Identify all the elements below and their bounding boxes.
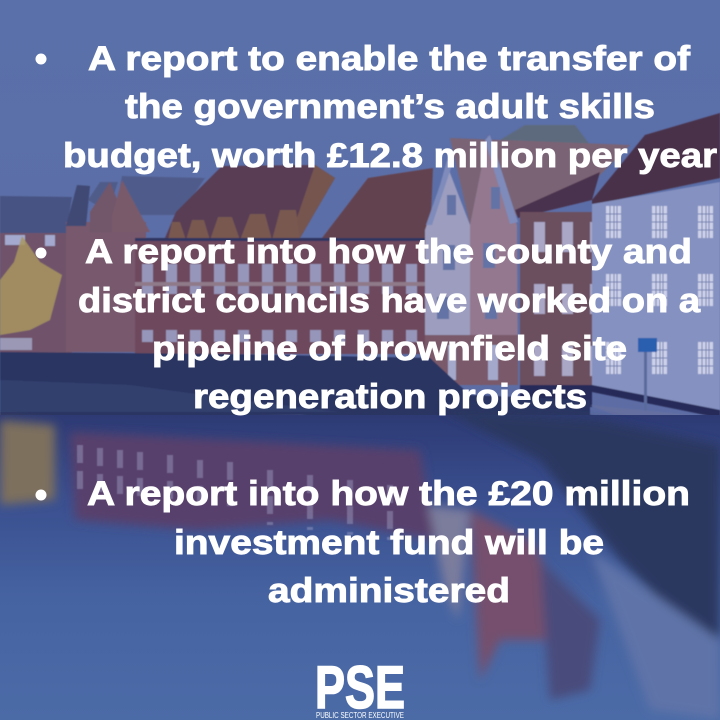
bullet 3: investment fund: A report into how the £20 million: [87, 475, 690, 513]
bullet 3: investment fund: [36, 475, 690, 610]
bullet 2: brownfield regeneration: pipeline of brownfield site: [152, 330, 627, 368]
bullet 2: brownfield regeneration: district councils have worked on a: [78, 282, 701, 320]
logo: PSE: PSE: [315, 654, 405, 720]
bullet 1: adult skills budget: [36, 40, 717, 175]
bullet 2: brownfield regeneration: [36, 233, 701, 416]
bullet 1: adult skills budget: the government’s adult skills: [125, 88, 655, 126]
bullet 1: adult skills budget: A report to enable the transfer of: [88, 40, 691, 78]
logo: PSE: PUBLIC SECTOR EXECUTIVE: [316, 711, 404, 720]
bullet 1: adult skills budget: budget, worth £12.8 million per year: [63, 137, 717, 175]
bullet 3: investment fund: investment fund will be: [174, 524, 604, 562]
bullet 2: brownfield regeneration: A report into how the county and: [85, 233, 692, 271]
bullet 2: brownfield regeneration: regeneration projects: [193, 378, 587, 416]
bullet 3: investment fund: administered: [268, 572, 510, 610]
